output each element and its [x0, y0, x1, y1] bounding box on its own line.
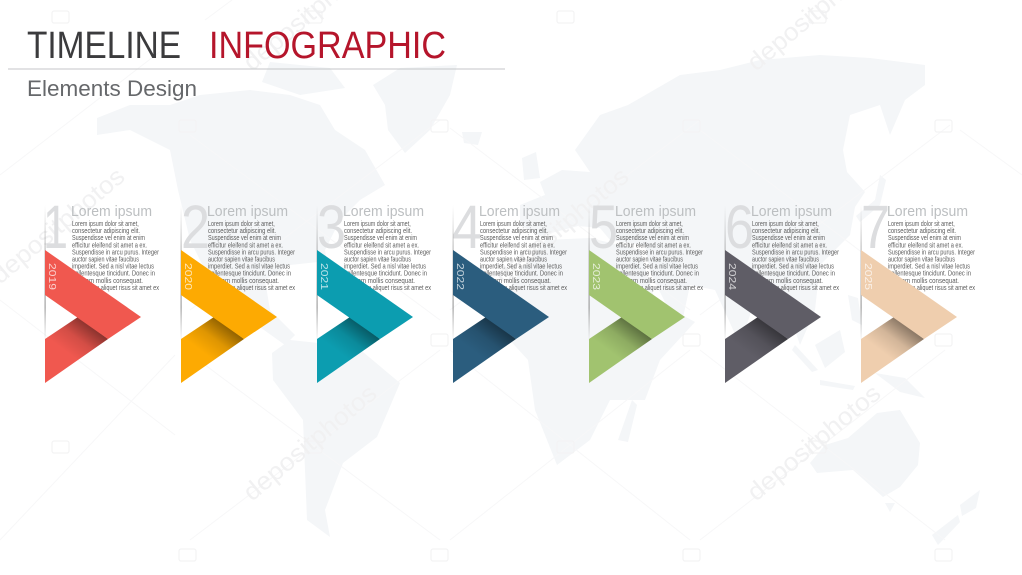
body text: consectetur adipiscing elit. [616, 226, 684, 235]
year: 2023 [590, 263, 601, 291]
arrow lower band [317, 317, 380, 383]
body text: Vestibulum aliquet risus sit amet ex [888, 283, 975, 292]
arrow upper band [45, 250, 141, 339]
body text: consectetur adipiscing elit. [208, 226, 276, 235]
body text: Suspendisse vel enim at enim [208, 233, 281, 242]
body text: efficitur eleifend sit amet a ex. [72, 240, 147, 249]
body text: Lorem ipsum dolor sit amet, [888, 219, 955, 228]
body text: Suspendisse in arcu purus. Integer [344, 247, 431, 256]
body text: Aliquam mollis consequat. [888, 276, 959, 285]
body text: Lorem ipsum dolor sit amet, [208, 219, 275, 228]
body text: Lorem ipsum dolor sit amet, [72, 219, 139, 228]
body text: consectetur adipiscing elit. [344, 226, 412, 235]
arrow lower band [589, 317, 652, 383]
year: 2020 [182, 263, 193, 291]
body text: imperdiet. Sed a nisl vitae lectus [752, 262, 834, 271]
body text: Aliquam mollis consequat. [208, 276, 279, 285]
year: 2019 [46, 263, 57, 291]
body text: pellentesque tincidunt. Donec in [480, 269, 563, 278]
timeline step 7 [860, 193, 975, 383]
body text: imperdiet. Sed a nisl vitae lectus [72, 262, 154, 271]
body text: Vestibulum aliquet risus sit amet ex [616, 283, 703, 292]
body text: imperdiet. Sed a nisl vitae lectus [616, 262, 698, 271]
body text: consectetur adipiscing elit. [480, 226, 548, 235]
arrow lower band [725, 317, 788, 383]
body text: Suspendisse vel enim at enim [616, 233, 689, 242]
body text: Vestibulum aliquet risus sit amet ex [72, 283, 159, 292]
number: 2 [181, 193, 210, 261]
body text: Suspendisse vel enim at enim [752, 233, 825, 242]
body text: Aliquam mollis consequat. [752, 276, 823, 285]
body text: imperdiet. Sed a nisl vitae lectus [208, 262, 290, 271]
title: TIMELINE [27, 25, 181, 67]
body text: consectetur adipiscing elit. [752, 226, 820, 235]
year: 2024 [726, 263, 737, 291]
divider [724, 205, 726, 342]
body text: Aliquam mollis consequat. [72, 276, 143, 285]
body text: Aliquam mollis consequat. [344, 276, 415, 285]
body text: consectetur adipiscing elit. [888, 226, 956, 235]
year: 2022 [454, 263, 465, 291]
heading: Lorem ipsum [479, 204, 560, 220]
divider [180, 205, 182, 342]
body text: Suspendisse in arcu purus. Integer [752, 247, 839, 256]
number: 3 [317, 193, 346, 261]
body text: Vestibulum aliquet risus sit amet ex [480, 283, 567, 292]
body text: efficitur eleifend sit amet a ex. [480, 240, 555, 249]
arrow upper band [861, 250, 957, 339]
arrow lower band [45, 317, 108, 383]
watermark text: depositphotos [742, 379, 886, 507]
body text: Vestibulum aliquet risus sit amet ex [344, 283, 431, 292]
heading: Lorem ipsum [615, 204, 696, 220]
arrow lower band [861, 317, 924, 383]
number: 1 [43, 193, 68, 261]
body text: auctor sapien vitae faucibus [752, 254, 819, 264]
body text: efficitur eleifend sit amet a ex. [752, 240, 827, 249]
timeline step 2 [180, 193, 295, 383]
arrow upper band [317, 250, 413, 339]
body text: imperdiet. Sed a nisl vitae lectus [888, 262, 970, 271]
body text: pellentesque tincidunt. Donec in [616, 269, 699, 278]
subtitle: Elements Design [27, 76, 197, 101]
timeline step 1 [43, 193, 159, 383]
body text: pellentesque tincidunt. Donec in [888, 269, 971, 278]
watermark text: depositphotos [238, 379, 382, 507]
arrow upper band [725, 250, 821, 339]
body text: Lorem ipsum dolor sit amet, [752, 219, 819, 228]
body text: efficitur eleifend sit amet a ex. [616, 240, 691, 249]
body text: auctor sapien vitae faucibus [480, 254, 547, 264]
body text: Lorem ipsum dolor sit amet, [480, 219, 547, 228]
number: 4 [452, 193, 482, 261]
body text: Lorem ipsum dolor sit amet, [616, 219, 683, 228]
body text: Suspendisse vel enim at enim [344, 233, 417, 242]
title accent: INFOGRAPHIC [209, 25, 446, 67]
heading: Lorem ipsum [343, 204, 424, 220]
watermark text [0, 0, 886, 507]
timeline step 6 [724, 193, 839, 383]
arrow upper band [589, 250, 685, 339]
body text: Aliquam mollis consequat. [616, 276, 687, 285]
year: 2025 [862, 263, 873, 291]
body text: imperdiet. Sed a nisl vitae lectus [480, 262, 562, 271]
divider [452, 205, 454, 342]
arrow lower band [181, 317, 244, 383]
body text: Suspendisse in arcu purus. Integer [616, 247, 703, 256]
body text: imperdiet. Sed a nisl vitae lectus [344, 262, 426, 271]
body text: pellentesque tincidunt. Donec in [752, 269, 835, 278]
timeline step 5 [588, 193, 703, 383]
body text: auctor sapien vitae faucibus [888, 254, 955, 264]
body text: Suspendisse in arcu purus. Integer [208, 247, 295, 256]
number: 5 [589, 193, 618, 261]
body text: pellentesque tincidunt. Donec in [344, 269, 427, 278]
divider [588, 205, 590, 342]
body text: auctor sapien vitae faucibus [616, 254, 683, 264]
body text: efficitur eleifend sit amet a ex. [888, 240, 963, 249]
timeline step 4 [452, 193, 567, 383]
number: 6 [725, 193, 754, 261]
number: 7 [861, 193, 890, 261]
divider [316, 205, 318, 342]
arrow upper band [181, 250, 277, 339]
body text: pellentesque tincidunt. Donec in [72, 269, 155, 278]
body text: Lorem ipsum dolor sit amet, [344, 219, 411, 228]
body text: Vestibulum aliquet risus sit amet ex [208, 283, 295, 292]
body text: Suspendisse in arcu purus. Integer [888, 247, 975, 256]
body text: auctor sapien vitae faucibus [344, 254, 411, 264]
body text: Suspendisse in arcu purus. Integer [480, 247, 567, 256]
body text: Suspendisse vel enim at enim [480, 233, 553, 242]
arrow lower band [453, 317, 516, 383]
body text: Suspendisse in arcu purus. Integer [72, 247, 159, 256]
body text: consectetur adipiscing elit. [72, 226, 140, 235]
body text: Suspendisse vel enim at enim [72, 233, 145, 242]
body text: Vestibulum aliquet risus sit amet ex [752, 283, 839, 292]
body text: efficitur eleifend sit amet a ex. [208, 240, 283, 249]
body text: pellentesque tincidunt. Donec in [208, 269, 291, 278]
heading: Lorem ipsum [887, 204, 968, 220]
body text: Aliquam mollis consequat. [480, 276, 551, 285]
heading: Lorem ipsum [207, 204, 288, 220]
body text: auctor sapien vitae faucibus [72, 254, 139, 264]
heading: Lorem ipsum [751, 204, 832, 220]
timeline step 3 [316, 193, 431, 383]
body text: auctor sapien vitae faucibus [208, 254, 275, 264]
heading: Lorem ipsum [71, 204, 152, 220]
body text: Suspendisse vel enim at enim [888, 233, 961, 242]
world map [97, 55, 980, 545]
body text: efficitur eleifend sit amet a ex. [344, 240, 419, 249]
year: 2021 [318, 263, 329, 291]
arrow upper band [453, 250, 549, 339]
watermark text: depositphotos [490, 162, 634, 290]
divider [860, 205, 862, 342]
divider [44, 205, 46, 342]
